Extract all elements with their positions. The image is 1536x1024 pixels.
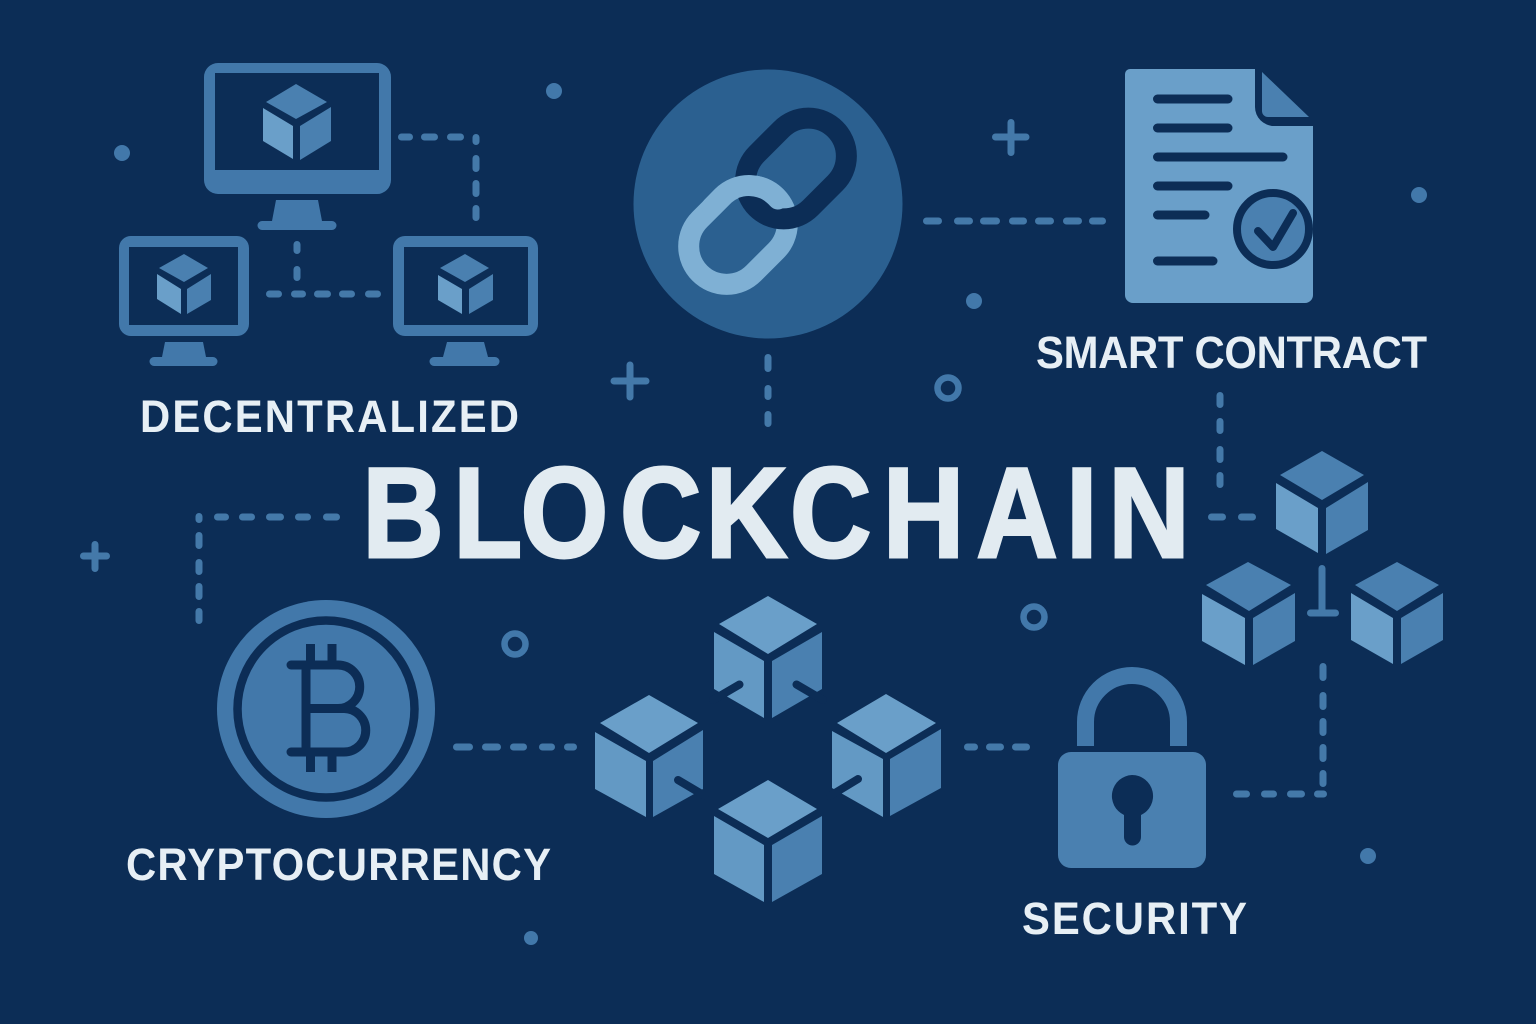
icon: trio left block [1202,562,1295,665]
decoration: dots [114,83,1427,945]
connector: cubes to lock [968,744,1026,750]
panel: smart contract [1036,69,1428,378]
panel: security [1022,676,1247,944]
panel: block cluster [595,596,941,902]
connector: link to center [764,358,772,424]
panel: decentralized network [119,63,538,442]
icon: right block [830,694,941,817]
icon: trio right block [1351,562,1443,664]
label: smart contract: SMART CONTRACT [1036,329,1428,378]
icon: bitcoin coin [217,600,435,818]
label: security: SECURITY [1022,895,1247,944]
icon: left block [595,695,705,817]
connector: trio T junction [1310,568,1336,613]
icon: left monitor [119,236,249,366]
panel: cryptocurrency [126,600,551,890]
decoration: plus signs [84,122,1026,568]
connector: title to cryptocurrency [199,516,336,620]
icon: right monitor [393,236,538,366]
icon: trio top block [1276,451,1368,554]
connector: coin to cubes [456,744,574,750]
title: BLOCKCHAIN [362,441,1190,585]
icon: top monitor [204,63,391,230]
panel: block trio [1202,451,1443,665]
icon: padlock [1058,676,1206,868]
icon: top block [713,596,823,718]
connector: link to smart contract [926,218,1102,224]
connector: monitors dashed lines [270,137,476,294]
label: cryptocurrency: CRYPTOCURRENCY [126,841,551,890]
icon: contract document [1125,69,1321,303]
decoration: rings [504,378,1044,654]
icon: bottom block [714,780,822,902]
connector: contract to blocks [1212,396,1252,517]
icon: chain link in circle [634,70,902,338]
connector: trio to lock [1236,666,1324,794]
label: decentralized: DECENTRALIZED [140,393,519,442]
